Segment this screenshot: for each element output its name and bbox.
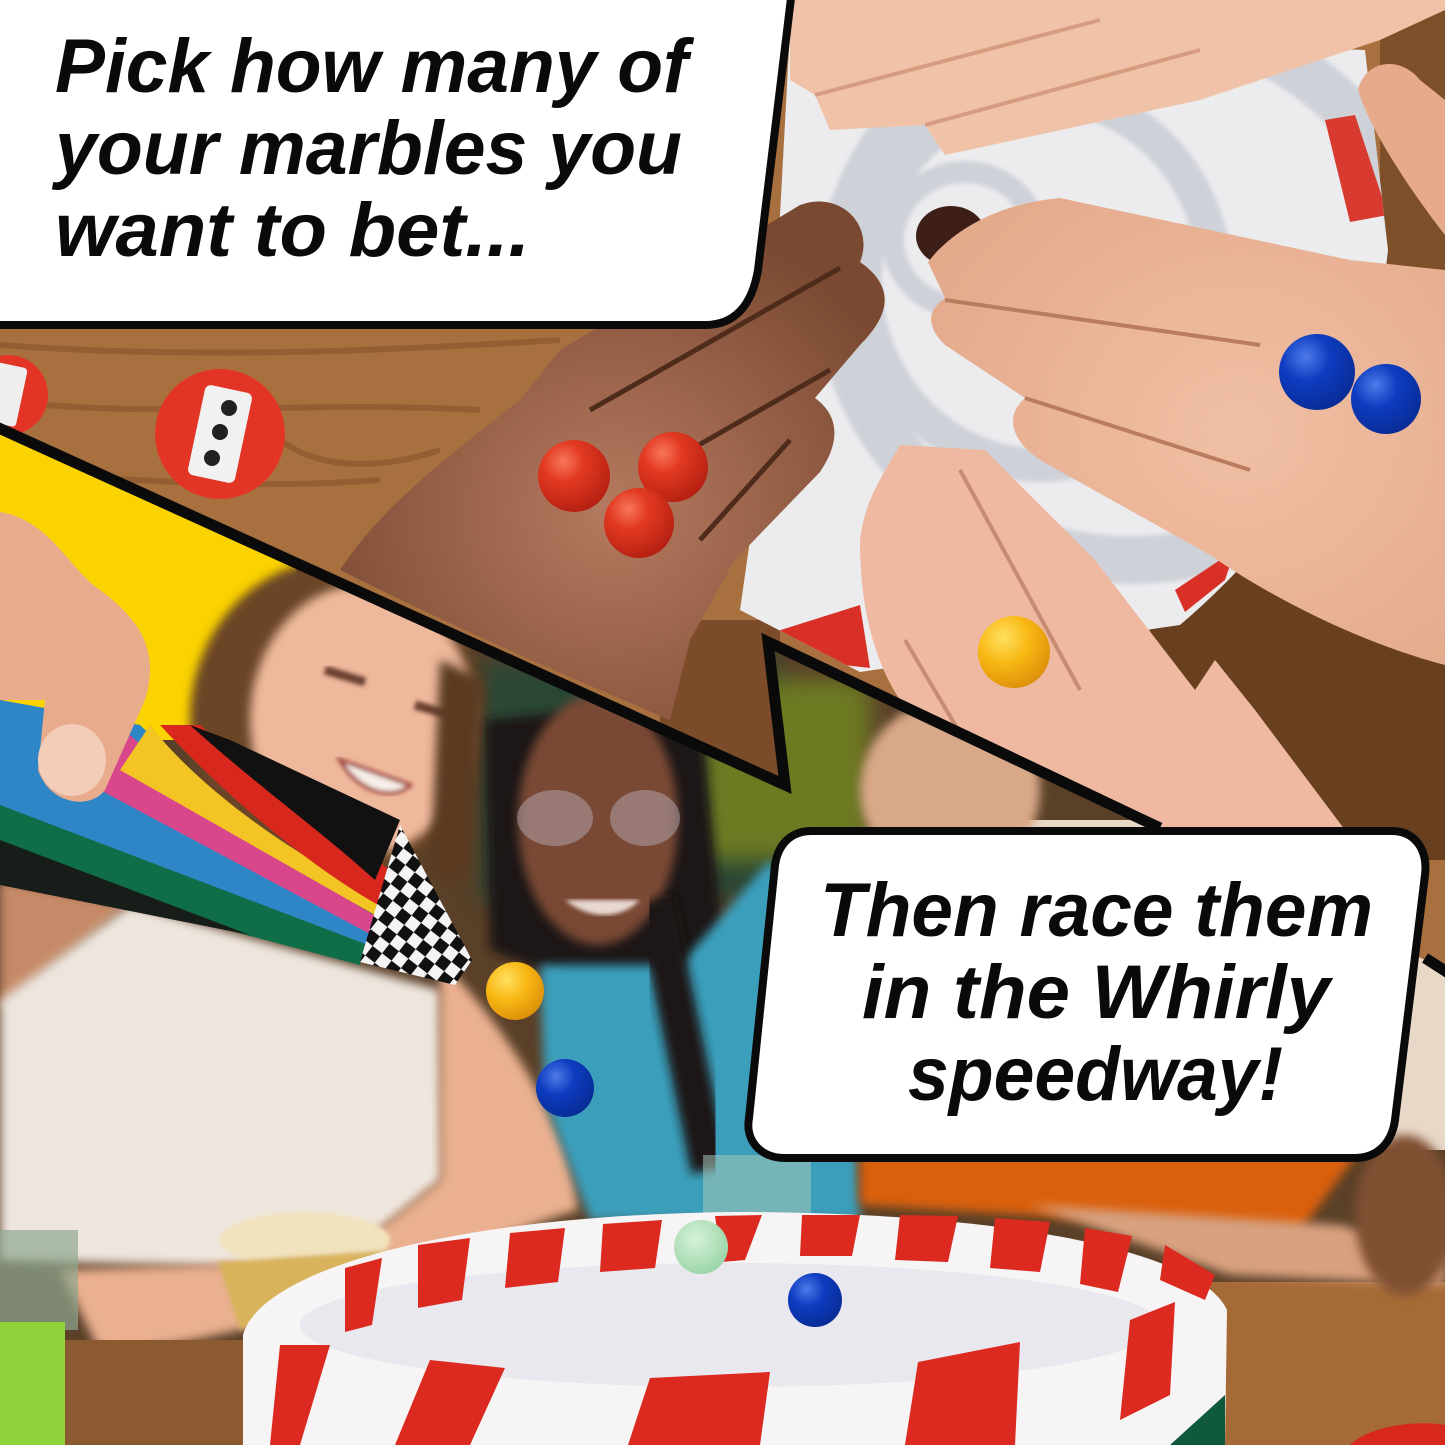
red game token with domino, left	[0, 355, 48, 435]
lower photo panel: players	[0, 420, 1445, 1445]
hand holding ramp	[0, 512, 150, 802]
flying blue marble	[536, 1059, 594, 1117]
bubble text: want to bet...	[55, 188, 530, 273]
bubble text	[820, 868, 1373, 1117]
table right	[1200, 1282, 1445, 1445]
red marbles	[538, 432, 708, 558]
popcorn bowl	[218, 1212, 390, 1330]
blue marbles	[1279, 334, 1421, 434]
red game token with domino, centre	[155, 369, 285, 499]
hand: top hands	[790, 0, 1445, 235]
rainbow launch ramp	[0, 700, 400, 965]
woman at back	[854, 709, 1047, 827]
green marble on track	[674, 1220, 728, 1274]
bubble text: your marbles you	[51, 106, 682, 191]
ramp checkered end	[360, 825, 472, 985]
bubble text	[51, 24, 695, 273]
hand: lower palm with yellow marble	[860, 445, 1345, 830]
orange sleeve player	[852, 1162, 1360, 1228]
right edge border stroke	[1425, 958, 1445, 974]
bubble text: Then race them	[820, 868, 1373, 953]
hand: right palm with blue marbles	[928, 198, 1445, 665]
bubble text: in the Whirly	[862, 950, 1334, 1035]
bowl centre hole	[916, 206, 986, 266]
woman with white top	[0, 560, 578, 1352]
bubble text: Pick how many of	[55, 24, 695, 109]
small glass	[703, 1155, 811, 1225]
whirly bowl with spiral	[740, 40, 1388, 672]
table left	[65, 1340, 243, 1445]
blue marble on track	[788, 1273, 842, 1327]
whirly speedway track	[243, 1212, 1445, 1445]
hand: dark palm with red marbles	[340, 201, 885, 720]
wooden wall background	[0, 0, 1445, 1000]
speech bubble: pick your marbles	[0, 0, 792, 325]
woman with glasses	[485, 695, 860, 1220]
bubble text: speedway!	[908, 1032, 1283, 1117]
yellow marble	[978, 616, 1050, 688]
right forearm	[1030, 1205, 1445, 1285]
green drink glass	[0, 1230, 78, 1445]
speech bubble: race them	[748, 831, 1425, 1158]
comic panel border with tail	[0, 424, 1160, 828]
flying yellow marble	[486, 962, 544, 1020]
